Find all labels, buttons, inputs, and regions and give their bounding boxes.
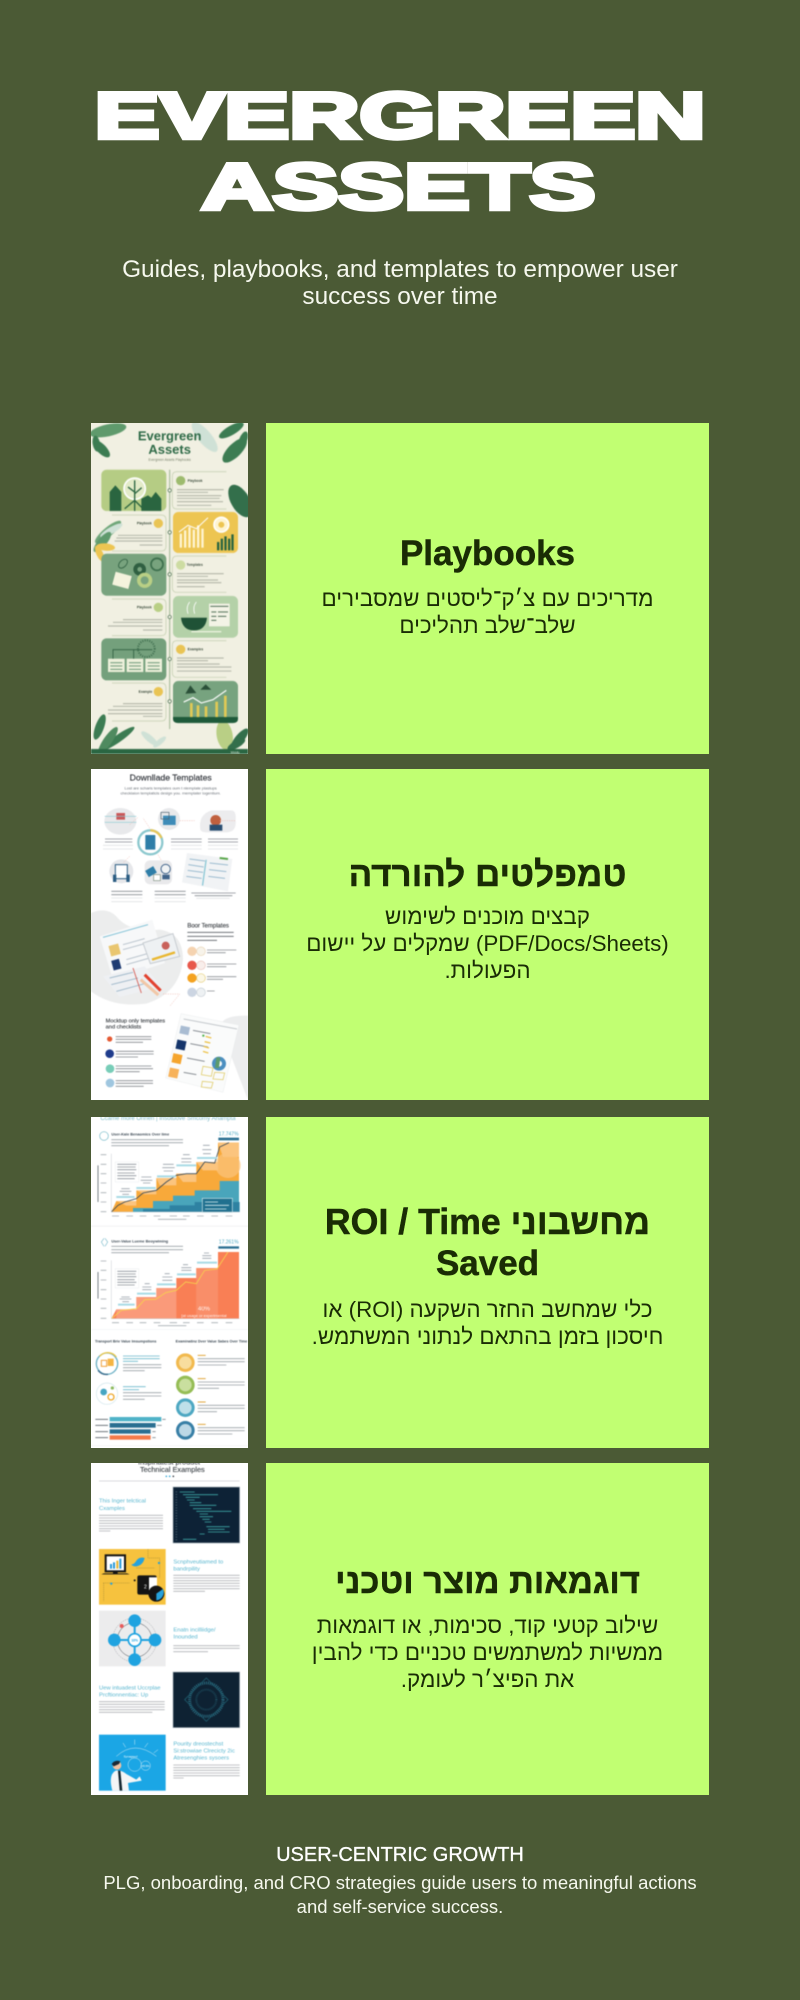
heading: טמפלטים להורדה [349,855,626,894]
card: technical examples [266,1463,709,1795]
body text: את הפיצ׳ר לעומק. [401,1667,574,1692]
thumbnail: technical examples mini infographic: Prcftionnentiac: Up [99,1693,148,1699]
body text: (PDF/Docs/Sheets) שמקלים על יישום [306,931,669,956]
heading: מחשבוני ROI / Time [325,1202,650,1242]
card: ROI: Saved [436,1244,539,1283]
thumbnail: templates mini infographic [91,769,248,1100]
thumbnail: technical examples mini infographic: Atresenghies sysoers [173,1755,229,1761]
subtitle: Guides, playbooks, and templates to empower user [122,256,678,283]
thumbnail: technical examples mini infographic: Technical Examples [140,1465,205,1474]
thumbnail: ROI charts mini infographic [91,1117,248,1448]
thumbnail: ROI charts mini infographic: User-Value Lueme Beoywiming [111,1239,169,1243]
panel: ROI calculators [91,1117,709,1448]
thumbnail: templates mini infographic: and checklists [106,1024,141,1030]
yellow image [99,1549,166,1605]
body text: מדריכים עם צ׳ק־ליסטים שמסבירים [322,586,653,611]
thumbnail: technical examples mini infographic: Uew intuadest Uccrplae [99,1685,161,1691]
panel: product and technical examples [91,1463,709,1795]
body text [322,586,653,638]
thumbnail: evergreen assets mini infographic: Evergreen [138,428,202,443]
panel: playbooks [91,423,709,754]
thumbnail: evergreen assets mini infographic: Evergreen Assets Playbooks [148,458,191,462]
footer text [103,1872,697,1917]
body text: שלב־שלב תהליכים [399,613,576,638]
thumbnail: technical examples mini infographic: 2 [144,1584,147,1590]
text cards [112,472,226,721]
thumbnail: technical examples mini infographic: 10% [131,1638,138,1642]
body text [312,1297,663,1349]
lower sections: Examinatinz Dver Value Sabes Over Time [176,1339,247,1343]
body text: הפעולות. [444,958,531,983]
thumbnail: technical examples mini infographic: bandrpility [173,1566,200,1572]
heading: Playbooks [400,534,575,573]
thumbnail: technical examples mini infographic: This Inger telctical [99,1499,146,1505]
subtitle [122,256,678,310]
title: ASSETS [202,150,596,223]
mini bar chart [110,1417,161,1421]
thumbnail: evergreen assets mini infographic: Playbook [137,605,152,609]
thumbnail: evergreen assets mini infographic: Playbook [188,479,203,483]
picture panels [101,470,166,511]
lower sections [95,1339,247,1343]
thumbnail: technical examples mini infographic [91,1463,248,1795]
thumbnail: technical examples mini infographic: 45.5% [142,1764,150,1768]
footer [103,1844,697,1917]
thumbnail: ROI charts mini infographic: 17.261% [219,1240,239,1246]
lower sections: Transport Brie Value Imsumpstions [95,1339,156,1343]
thumbnail: evergreen assets mini infographic: Templates [187,563,203,567]
thumbnail: templates mini infographic: Mocktup only templates [106,1018,165,1024]
thumbnail: evergreen assets mini infographic: Playbook [137,521,152,525]
thumbnail: templates mini infographic: checklaion templaticis design you. rnemplater logentium. [121,790,221,795]
thumbnail: ROI charts mini infographic: 17.747% [219,1132,239,1138]
thumbnail: templates mini infographic: Downllade Templates [130,773,212,783]
thumbnail: ROI charts mini infographic: 40% [198,1307,211,1313]
thumbnail: technical examples mini infographic: Si:strowiae Clrecicty 2ic [173,1748,235,1754]
thumbnail: templates mini infographic: Lost are scharis templates oum t nlemplate plastups [125,786,217,791]
body text [306,904,669,983]
thumbnail: ROI charts mini infographic: [at usage or experimental [181,1313,227,1318]
card: ROI [266,1117,709,1448]
body text: ממשיות למשתמשים טכניים כדי להבין [312,1640,663,1665]
chart one [100,1132,108,1140]
body text [312,1613,663,1692]
thumbnail: technical examples mini infographic: Pourity dreostechst [173,1741,224,1747]
title [94,79,706,223]
footer heading: USER-CENTRIC GROWTH [276,1844,524,1866]
card: playbooks [266,423,709,754]
body text: קבצים מוכנים לשימוש [385,904,590,929]
thumbnail: technical examples mini infographic: Cxamples [99,1506,125,1512]
chart two [101,1238,108,1246]
card: templates [266,769,709,1100]
body text: שילוב קטעי קוד, סכימות, או דוגמאות [317,1613,658,1638]
thumbnail: templates mini infographic: Boor Templates [187,924,229,930]
subtitle: success over time [302,283,498,310]
grey diagram image [99,1611,166,1666]
thumbnail: technical examples mini infographic: Inounded [173,1634,198,1640]
thumbnail: evergreen assets mini infographic: Examples [188,647,203,651]
thumbnail: technical examples mini infographic: Enatn incilliidge/ [173,1628,216,1634]
body text: כלי שמחשב החזר השקעה (ROI) או [322,1297,652,1322]
thumbnail: ROI charts mini infographic: User-Kale Benaomics Over Iime [111,1132,169,1136]
dark network image [173,1672,240,1728]
thumbnail: technical examples mini infographic: Synagsec! [124,1755,138,1759]
footer text: and self-service success. [297,1896,503,1917]
title: EVERGREEN [94,79,706,152]
panel: downloadable templates [91,769,709,1100]
footer text: PLG, onboarding, and CRO strategies guide users to meaningful actions [103,1872,697,1893]
thumbnail: evergreen assets mini infographic [91,423,248,754]
thumbnail: evergreen assets mini infographic: Assets [148,442,191,457]
thumbnail: technical examples mini infographic: Scnphveutiamed to [173,1559,223,1565]
body text: חיסכון בזמן בהתאם לנתוני המשתמש. [312,1324,663,1349]
heading: דוגמאות מוצר וטכני [335,1563,640,1601]
thumbnail: evergreen assets mini infographic: Example [139,690,152,694]
blue person image [99,1735,166,1791]
